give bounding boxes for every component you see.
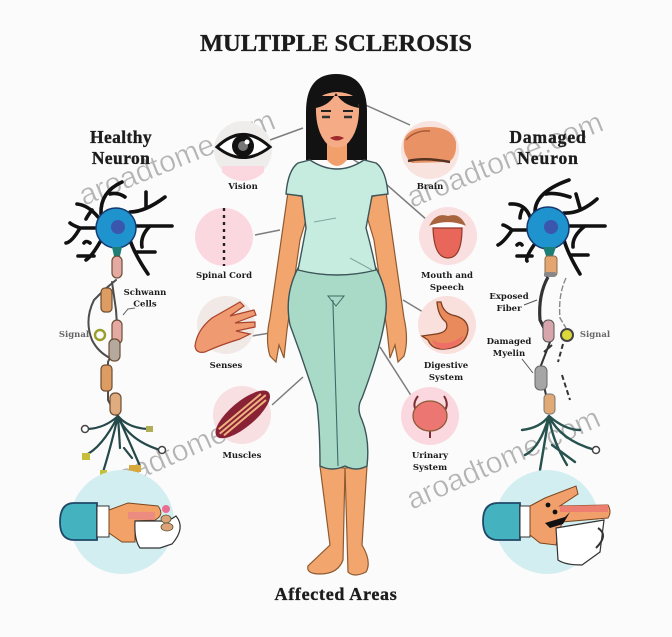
panel: vision xyxy=(214,121,272,192)
tremor marks xyxy=(545,512,570,528)
axon hillock xyxy=(545,256,557,276)
damaged neuron xyxy=(487,180,611,470)
axon terminals xyxy=(84,416,160,472)
healthy neuron xyxy=(59,182,172,477)
label: urinary system: System xyxy=(413,463,447,473)
footer heading: Affected Areas xyxy=(275,584,397,604)
heading: healthy neuron: Healthy xyxy=(90,127,152,147)
label: digestive system: System xyxy=(429,373,463,383)
dendrites xyxy=(66,182,172,274)
icon: bladder xyxy=(413,396,447,438)
label: mouth and speech: Speech xyxy=(430,283,464,293)
icon: mouth xyxy=(429,215,466,258)
icon: spinal cord xyxy=(223,208,225,266)
signal marker xyxy=(561,329,573,341)
label: signal: Signal xyxy=(580,330,611,340)
cuff xyxy=(60,503,97,540)
watermarks: aroadtome.com xyxy=(74,104,280,212)
heading: damaged neuron: Neuron xyxy=(517,148,579,168)
watermarks xyxy=(74,104,608,516)
icon: muscle xyxy=(209,383,277,446)
icon: hand xyxy=(195,302,256,352)
damaged hand illustration xyxy=(483,470,610,574)
soma xyxy=(96,208,136,248)
panel: brain xyxy=(401,121,459,192)
figure: woman xyxy=(268,74,406,575)
t-shirt xyxy=(286,160,388,275)
mug xyxy=(556,520,604,565)
label: exposed fiber: Fiber xyxy=(496,304,522,314)
title: MULTIPLE SCLEROSIS xyxy=(200,30,472,57)
arms xyxy=(268,192,312,362)
label: muscles: Muscles xyxy=(223,451,262,461)
watermarks: aroadtome.com xyxy=(402,106,608,214)
neck and face xyxy=(327,135,347,166)
fingers and object xyxy=(135,516,180,548)
hair xyxy=(306,74,367,160)
heading: damaged neuron: Damaged xyxy=(509,127,587,147)
panel: spinal cord xyxy=(195,208,253,281)
panel: muscles xyxy=(209,383,277,461)
watermarks: aroadtome xyxy=(87,416,232,504)
label: signal: Signal xyxy=(59,330,90,340)
watermarks: aroadtome.com xyxy=(401,401,605,516)
cuff xyxy=(483,503,520,540)
signal marker xyxy=(95,330,105,340)
connector lines xyxy=(252,98,427,405)
label: damaged myelin: Myelin xyxy=(493,349,525,359)
leggings xyxy=(288,268,386,469)
axon xyxy=(88,280,118,415)
panel: digestive system xyxy=(418,296,476,383)
label: exposed fiber: Exposed xyxy=(489,292,529,302)
exposed fibre xyxy=(540,277,550,340)
label: senses: Senses xyxy=(210,361,243,371)
legs xyxy=(308,466,345,574)
label: brain: Brain xyxy=(417,182,443,192)
hand xyxy=(530,486,610,545)
icon: eye xyxy=(217,134,270,158)
panel: urinary system xyxy=(401,387,459,473)
damaged myelin segments xyxy=(543,320,554,342)
icon: brain xyxy=(404,127,456,163)
panel: senses xyxy=(195,296,256,371)
label: urinary system: Urinary xyxy=(412,451,448,461)
label: vision: Vision xyxy=(227,182,258,192)
icon: stomach xyxy=(422,302,468,349)
hand xyxy=(109,503,161,542)
panel: mouth and speech xyxy=(419,207,477,293)
dendrites xyxy=(498,180,605,274)
soma xyxy=(527,207,569,249)
label: schwann cells: Cells xyxy=(133,300,157,310)
label: damaged myelin: Damaged xyxy=(487,337,531,347)
axon terminals xyxy=(522,416,595,470)
schwann cell segments xyxy=(101,256,122,415)
label: digestive system: Digestive xyxy=(424,361,468,371)
heading: healthy neuron: Neuron xyxy=(92,148,150,168)
label: spinal cord: Spinal Cord xyxy=(196,271,252,281)
label: mouth and speech: Mouth and xyxy=(421,271,473,281)
healthy hand illustration xyxy=(60,470,180,574)
label: schwann cells: Schwann xyxy=(124,288,166,298)
